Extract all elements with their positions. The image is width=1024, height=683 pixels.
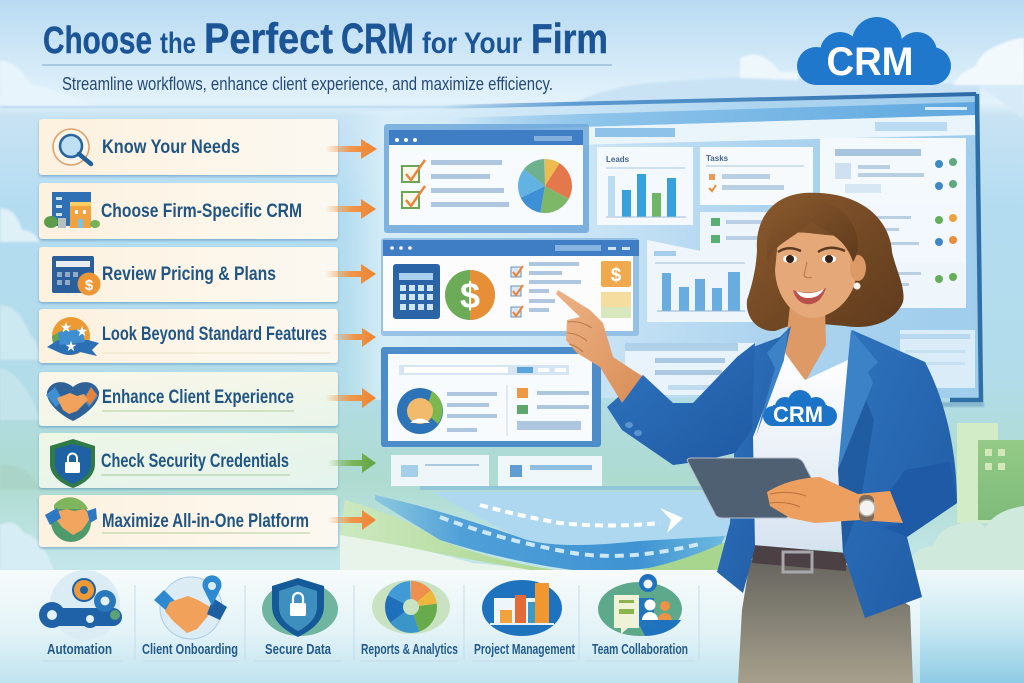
background city buildings: [957, 423, 1024, 523]
icon: stars ribbon: ★: [60, 319, 72, 335]
feature: secure data: [262, 578, 338, 658]
icon: stars ribbon: ★: [65, 338, 77, 354]
wristwatch: [859, 495, 875, 522]
tablet: [687, 458, 816, 518]
title: the: [160, 27, 196, 60]
panel: leads chart: Leads: [606, 155, 630, 164]
background clouds and hills: [0, 38, 1024, 570]
bottom strip background: [0, 570, 1024, 683]
list lines: [431, 160, 509, 207]
left lapel: [756, 330, 788, 436]
icon: stars ribbon: ★: [76, 323, 88, 339]
feature: automation: [39, 570, 122, 658]
icon: calculator coin: $: [85, 277, 94, 294]
small lower windows: [391, 455, 740, 490]
blazer left front: [717, 326, 791, 593]
shirt CRM cloud: [763, 390, 837, 427]
bottom strip right side: [920, 570, 1024, 683]
ear and earring: [850, 255, 866, 290]
step 5 card: [39, 372, 338, 426]
title: Choose: [43, 20, 152, 62]
finger lines: [770, 492, 806, 507]
step 3 card: [39, 247, 338, 302]
step 1 card: [39, 119, 338, 175]
icon: dollar tag: $: [611, 265, 622, 286]
pointing arm and hand: [556, 290, 642, 403]
dashboard window 3: client profile: [381, 347, 601, 447]
dashboard window 2: pricing: [381, 238, 639, 336]
shirt CRM cloud: CRM: [773, 402, 823, 427]
feature: project management: [474, 580, 575, 658]
icon: security shield: [50, 439, 95, 488]
panel: tasks list: Tasks: [706, 154, 729, 163]
eyes and brows: [778, 248, 845, 278]
title rule: [42, 64, 612, 66]
feature: client onboarding: Client Onboarding: [142, 642, 238, 658]
check list: [511, 262, 581, 317]
icon: stars ribbon: [47, 317, 99, 356]
right lapel: [838, 330, 878, 470]
panel: contacts middle: [860, 204, 966, 267]
title: for Your: [422, 27, 522, 60]
sleeve buttons: [625, 422, 642, 436]
icon: dollar coin: [445, 270, 495, 320]
title: [43, 15, 608, 63]
icon: dollar coin: $: [460, 275, 480, 316]
panel: bar chart behind: [647, 240, 755, 322]
icon: donut avatar: [397, 388, 443, 434]
feature: secure data: Secure Data: [265, 642, 332, 658]
icon: dollar tag: [601, 261, 631, 318]
shirt: [753, 352, 848, 550]
feature separators: [42, 585, 699, 661]
feature: team collaboration: [592, 574, 688, 658]
feature: project management: Project Management: [474, 642, 575, 658]
icon: handshake: [45, 497, 97, 542]
panel: contacts lower: [870, 262, 966, 308]
feature: reports analytics: Reports & Analytics: [361, 642, 458, 658]
title: Firm: [531, 15, 608, 62]
background bushes: [905, 506, 1024, 570]
feature: team collaboration: Team Collaboration: [592, 642, 688, 658]
belt: [752, 545, 847, 572]
large dashboard screen: [345, 93, 984, 407]
blazer right front: [838, 330, 957, 618]
label: Check Security Credentials: [101, 450, 289, 472]
step 2 card: [39, 183, 338, 239]
CRM cloud badge: [797, 17, 951, 85]
feature: automation: Automation: [47, 642, 112, 658]
step card list: [39, 119, 338, 547]
panel: right lower: [900, 330, 975, 388]
label: Enhance Client Experience: [102, 386, 294, 408]
panel: contacts top: [820, 138, 966, 205]
background horizon line: [0, 106, 600, 108]
icon: check boxes: [402, 160, 425, 208]
subtitle: Streamline workflows, enhance client experience, and maximize efficiency.: [62, 74, 553, 94]
right sleeve fold: [883, 462, 957, 537]
icon: heart handshake: [46, 382, 99, 421]
icon: calculator: [393, 264, 440, 319]
panel: tasks lower: [700, 212, 813, 272]
label: Look Beyond Standard Features: [102, 323, 327, 345]
hair back: [747, 193, 904, 331]
blazer fold shading: [838, 360, 874, 552]
left sleeve: [607, 343, 755, 465]
title: CRM: [341, 15, 414, 63]
pie chart: [532, 172, 558, 200]
hair fringe: [767, 198, 858, 262]
panel: tasks list: [700, 147, 813, 205]
pants: [738, 560, 913, 683]
smile: [793, 288, 826, 304]
road with dashed arrow: [340, 492, 740, 570]
dashboard window 1: checklist and pie: [384, 124, 589, 233]
forearm and hand on tablet: [767, 477, 903, 523]
icon: magnifier: [53, 129, 91, 165]
face: [775, 233, 856, 318]
step 4 card: [39, 309, 338, 363]
icon: buildings: [44, 192, 100, 228]
label: Know Your Needs: [102, 136, 240, 158]
feature: reports analytics: [361, 580, 458, 658]
label: Review Pricing & Plans: [102, 263, 276, 285]
arrows from steps to windows: [325, 139, 377, 530]
bottom feature row: [39, 570, 699, 661]
step 6 card: [39, 433, 338, 488]
icon: calculator coin: [52, 256, 100, 296]
label: Maximize All-in-One Platform: [102, 510, 309, 532]
step 7 card: [39, 495, 338, 547]
neck: [785, 305, 826, 382]
title: Perfect: [204, 15, 333, 63]
panel: text lines lower: [625, 343, 755, 395]
label: Choose Firm-Specific CRM: [101, 200, 302, 222]
feature: client onboarding: [142, 575, 238, 658]
presenter woman: [556, 193, 957, 683]
panel: leads chart: [597, 147, 693, 225]
CRM cloud badge: CRM: [826, 40, 914, 84]
